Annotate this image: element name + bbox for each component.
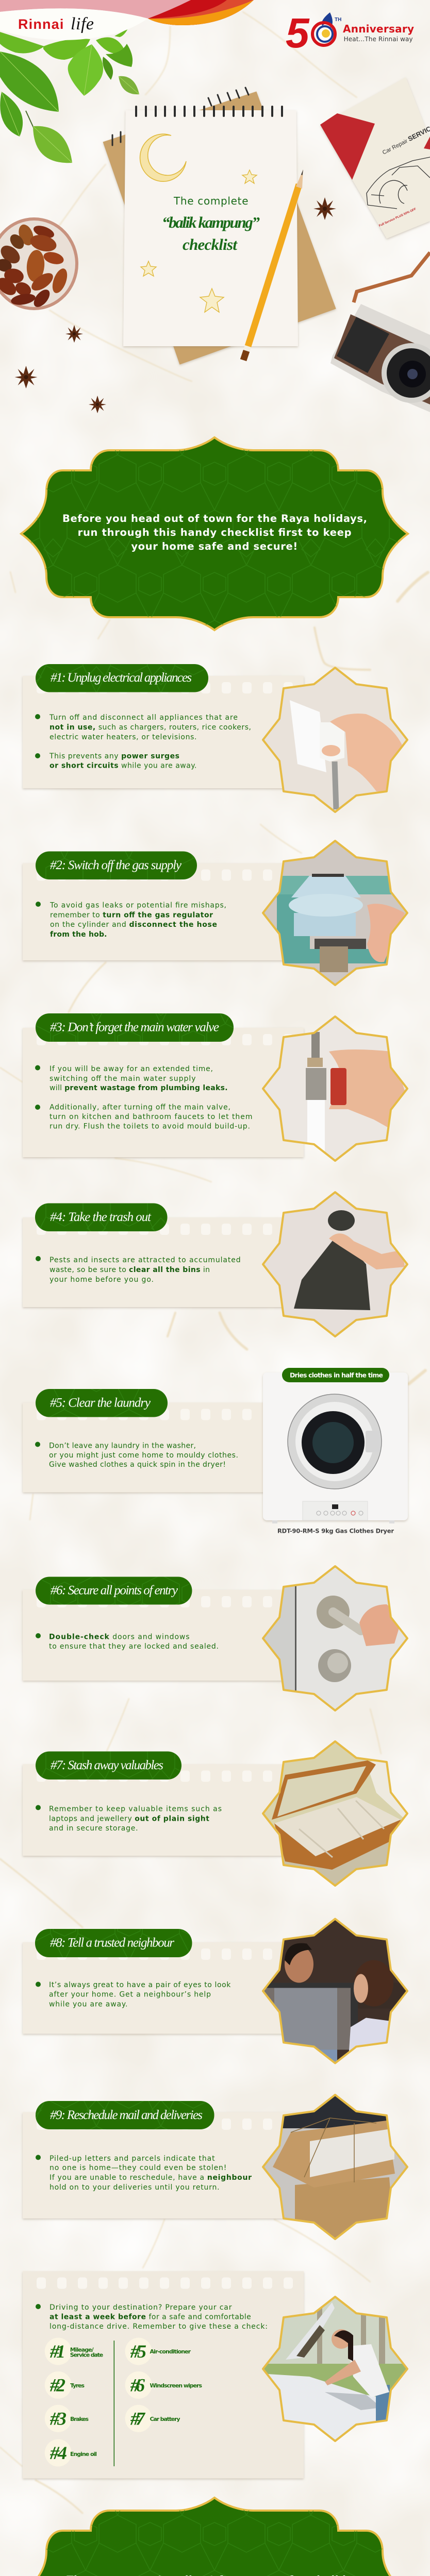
check 5: [125, 2338, 191, 2365]
check 1: Service date: [70, 2351, 103, 2359]
bullet text: If you are unable to reschedule, have a neighbour: [49, 2174, 252, 2182]
item 7: [23, 1739, 410, 1891]
title: The complete: [173, 195, 249, 207]
gold star: [141, 261, 156, 276]
heading pill: [36, 851, 197, 879]
bullet text: Pests and insects are attracted to accumulated: [49, 1256, 241, 1264]
note card: [23, 2112, 304, 2218]
crescent moon: [140, 134, 186, 181]
check 1: #1: [49, 2341, 65, 2362]
heading pill: #3: Don’t forget the main water valve: [50, 1020, 219, 1035]
star anise: [313, 197, 336, 220]
green leaves: [0, 29, 139, 163]
photo: jewellery box: [260, 1739, 410, 1891]
heading pill: #9: Reschedule mail and deliveries: [50, 2108, 203, 2122]
bullet text: from the hob.: [50, 930, 107, 939]
bullet text: and in secure storage.: [49, 1824, 138, 1833]
heading pill: #6: Secure all points of entry: [51, 1584, 178, 1597]
star anise: [89, 396, 106, 413]
pencil: [243, 170, 303, 360]
check 2: [45, 2371, 85, 2399]
50th anniversary logo: Anniversary: [343, 23, 414, 35]
Rinnai life logo panel: [0, 8, 148, 40]
check 4: [45, 2439, 97, 2467]
intro text: Before you head out of town for the Raya holidays,: [62, 513, 367, 524]
check 4: #4: [49, 2443, 67, 2463]
bullet text: [36, 1256, 241, 1284]
bullet text: switching off the main water supply: [49, 1075, 196, 1083]
check 6: [125, 2371, 202, 2399]
bullet text: [36, 1981, 231, 2008]
item 3: [23, 1013, 410, 1164]
note card: [23, 1028, 304, 1157]
bullet text: at least a week before for a safe and comfortable: [49, 2313, 251, 2321]
bullet text: long-distance drive. Remember to give these a check:: [49, 2323, 268, 2331]
kraft notebook spiral: [112, 88, 249, 145]
star anise: [14, 366, 37, 388]
item 4: [23, 1190, 410, 1339]
note card: [23, 1942, 304, 2034]
bullet text: [35, 1442, 238, 1469]
bullet text: will prevent wastage from plumbing leaks.: [49, 1084, 228, 1092]
bullet text: your home before you go.: [49, 1276, 154, 1284]
bullet text: hold on to your deliveries until you return.: [49, 2183, 220, 2192]
bullet text: or you might just come home to mouldy clothes.: [49, 1451, 238, 1460]
heading pill: [36, 1389, 168, 1417]
bullet text: no one is home—they could even be stolen!: [49, 2164, 226, 2172]
bullet text: [36, 2155, 252, 2192]
bullet text: after your home. Get a neighbour’s help: [49, 1991, 211, 1999]
photo: gas regulator: [260, 838, 410, 988]
intro text: run through this handy checklist first to keep: [78, 527, 352, 538]
bullet text: [35, 1065, 252, 1130]
bullet text: This prevents any power surges: [49, 752, 179, 760]
heading pill: #4: Take the trash out: [50, 1210, 152, 1224]
dryer tag: Dries clothes in half the time: [290, 1371, 383, 1379]
bullet text: turn on kitchen and bathroom faucets to let them: [49, 1113, 252, 1121]
heading pill: #1: Unplug electrical appliances: [51, 671, 192, 685]
check 7: #7: [130, 2408, 146, 2429]
Rinnai life logo panel: life: [71, 14, 94, 33]
check 3: #3: [49, 2408, 67, 2429]
bullet text: while you are away.: [49, 2000, 127, 2008]
50th anniversary logo: [286, 10, 414, 57]
gold star: [242, 170, 257, 183]
bullet text: run dry. Flush the toilets to avoid mould build-up.: [49, 1122, 250, 1130]
hero: desk flat lay: [0, 0, 430, 413]
photo: trash bag: [260, 1190, 410, 1339]
check 3: Brakes: [70, 2416, 89, 2422]
star anise: [65, 325, 83, 343]
dryer caption: RDT-90-RM-S 9kg Gas Clothes Dryer: [277, 1527, 394, 1534]
bullet text: Piled-up letters and parcels indicate that: [49, 2155, 215, 2163]
item 1: [23, 664, 410, 815]
item 5: [23, 1368, 408, 1534]
50th anniversary logo: 5: [286, 10, 310, 57]
heading pill: #5: Clear the laundry: [50, 1396, 151, 1410]
bullet text: to ensure that they are locked and sealed.: [49, 1642, 219, 1651]
heading pill: #2: Switch off the gas supply: [50, 858, 182, 872]
item 10: car check: [23, 2271, 410, 2478]
notepad spiral: [136, 107, 282, 116]
50th anniversary logo: TH: [335, 17, 341, 23]
note card: [23, 676, 304, 788]
intro text: your home safe and secure!: [131, 540, 297, 552]
note card: [23, 1402, 304, 1492]
check 2: Tyres: [70, 2382, 85, 2389]
bullet text: Remember to keep valuable items such as: [49, 1805, 222, 1814]
photo: door handles: [260, 1564, 410, 1713]
intro banner: [21, 437, 408, 630]
camera: [330, 252, 430, 412]
note card: [23, 1764, 304, 1856]
note card: [23, 1217, 304, 1307]
note card: [23, 1590, 304, 1681]
intro text: [62, 513, 367, 552]
bullet text: It’s always great to have a pair of eyes to look: [49, 1981, 231, 1989]
bullet text: If you will be away for an extended time,: [49, 1065, 213, 1073]
bullet text: Double-check doors and windows: [49, 1633, 190, 1641]
bullet text: [36, 1805, 222, 1833]
heading pill: #7: Stash away valuables: [51, 1758, 163, 1772]
check 7: Car battery: [150, 2416, 180, 2422]
heading pill: [36, 664, 208, 692]
bullet text: Don’t leave any laundry in the washer,: [49, 1442, 196, 1450]
check 5: Air-conditioner: [150, 2348, 191, 2355]
bullet text: electric water heaters, or televisions.: [49, 733, 197, 741]
heading pill: [36, 2101, 214, 2129]
bullet text: waste, so be sure to clear all the bins in: [49, 1266, 210, 1274]
bullet text: not in use, such as chargers, routers, rice cookers,: [49, 723, 251, 732]
dryer tag: [282, 1368, 389, 1382]
check 1: [45, 2338, 103, 2365]
heading pill: [35, 1204, 167, 1231]
50th anniversary logo: Heat...The Rinnai way: [344, 36, 413, 43]
bullet text: Give washed clothes a quick spin in the dryer!: [49, 1461, 226, 1469]
checklist divider: [113, 2341, 114, 2466]
gold star: [200, 289, 224, 312]
check 2: #2: [49, 2375, 65, 2396]
note card: [23, 2271, 304, 2478]
heading pill: #8: Tell a trusted neighbour: [50, 1936, 174, 1950]
heading pill: [36, 1577, 192, 1604]
check 7: [125, 2405, 180, 2432]
check 6: #6: [130, 2375, 145, 2396]
date bowl: [0, 217, 78, 310]
bullet text: To avoid gas leaks or potential fire mishaps,: [49, 902, 226, 910]
title: [162, 195, 260, 253]
check 3: [45, 2405, 89, 2432]
bullet text: laptops and jewellery out of plain sight: [49, 1815, 209, 1823]
item 8: [23, 1917, 410, 2066]
check 4: Engine oil: [70, 2451, 97, 2458]
photo: unplugging appliance: [260, 665, 410, 815]
bullet text: [36, 902, 226, 939]
bullet text: [35, 714, 251, 770]
bullet text: [36, 2303, 268, 2331]
bullet text: Driving to your destination? Prepare your car: [49, 2303, 232, 2312]
check 6: Windscreen wipers: [150, 2382, 202, 2389]
service booklet: [320, 77, 430, 239]
bullet text: Turn off and disconnect all appliances that are: [49, 714, 238, 722]
top wave: [0, 0, 254, 25]
item 9: [23, 2092, 410, 2242]
bullet text: Additionally, after turning off the main valve,: [49, 1104, 230, 1112]
heading pill: [35, 1929, 192, 1957]
service booklet: Full Service PLUS 50% OFF: [378, 208, 417, 228]
photo: parcels: [260, 2092, 410, 2242]
item 2: [23, 838, 410, 988]
photo: neighbours talking: [260, 1917, 410, 2066]
notepad: [123, 110, 298, 346]
photo: clothes dryer: [263, 1372, 408, 1523]
photo: checking car engine: [260, 2294, 410, 2445]
bullet text: [36, 1633, 219, 1651]
item 6: [23, 1564, 410, 1713]
note card: [23, 863, 304, 960]
check 1: Mileage/: [70, 2346, 94, 2353]
heading pill: [36, 1752, 181, 1780]
check 5: #5: [130, 2341, 146, 2362]
photo: water valve: [260, 1014, 410, 1164]
title: checklist: [183, 235, 238, 253]
title: “balik kampung”: [162, 213, 260, 231]
bullet text: on the cylinder and disconnect the hose: [50, 921, 217, 929]
closing banner: [21, 2498, 408, 2576]
bullet text: remember to turn off the gas regulator: [50, 911, 213, 919]
bullet text: or short circuits while you are away.: [49, 761, 197, 770]
Rinnai life logo panel: Rinnai: [18, 16, 63, 32]
heading pill: [36, 1013, 234, 1042]
kraft notebook: [103, 92, 336, 365]
